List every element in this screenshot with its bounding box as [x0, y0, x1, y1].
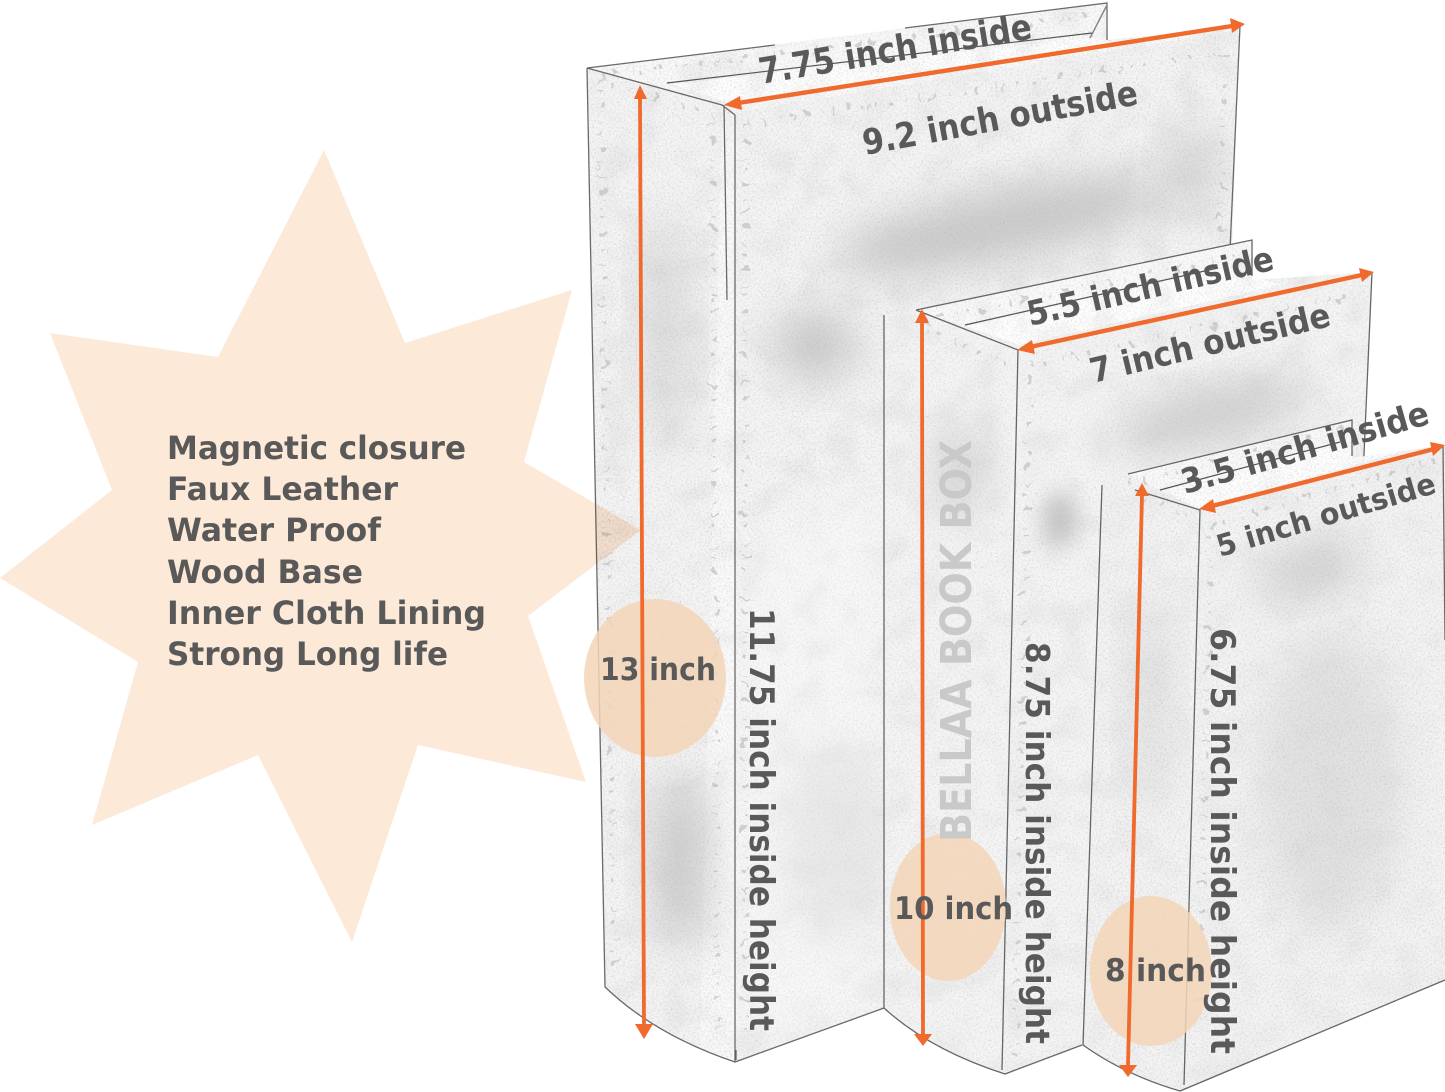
label: 11.75 inch inside height: 11.75 inch inside height	[741, 608, 781, 1031]
highlight circle: 8 inch	[1090, 896, 1212, 1046]
medium book box	[884, 235, 1374, 1075]
label: 5 inch outside: 5 inch outside	[1212, 467, 1440, 565]
label: 5.5 inch inside: 5.5 inch inside	[1023, 239, 1278, 335]
star badge	[0, 150, 641, 942]
label: 10 inch: 10 inch	[894, 891, 1013, 927]
big book box	[587, 0, 1247, 1070]
feature list	[167, 429, 486, 673]
feature list: Inner Cloth Lining	[167, 594, 486, 632]
small book box	[1083, 415, 1445, 1092]
arrow: 10 inch height	[914, 309, 932, 1046]
label: 6.75 inch inside height: 6.75 inch inside height	[1202, 628, 1242, 1054]
highlight circle: 13 inch	[584, 599, 726, 757]
feature list: Strong Long life	[167, 635, 448, 673]
arrow: 13 inch height	[634, 85, 653, 1039]
feature list: Water Proof	[167, 511, 382, 549]
highlight circle: 10 inch	[890, 833, 1006, 981]
label: 8 inch: 8 inch	[1105, 953, 1206, 989]
label: 7 inch outside: 7 inch outside	[1086, 295, 1334, 392]
label: 13 inch: 13 inch	[600, 652, 716, 688]
feature list: Faux Leather	[167, 470, 398, 508]
feature list: Wood Base	[167, 553, 363, 591]
label: 9.2 inch outside: 9.2 inch outside	[859, 74, 1141, 164]
arrow: 7 inch outside width	[1017, 268, 1374, 354]
arrow: 9.2 inch outside width	[724, 18, 1245, 110]
arrow: 5 inch outside width	[1199, 442, 1445, 513]
label: 8.75 inch inside height: 8.75 inch inside height	[1018, 642, 1057, 1044]
brand label: BELLAA BOOK BOX	[932, 440, 982, 842]
thin inside-width arrows	[667, 33, 1340, 1060]
label: 7.75 inch inside: 7.75 inch inside	[756, 7, 1035, 93]
feature list: Magnetic closure	[167, 429, 466, 467]
arrow: 8 inch height	[1119, 483, 1149, 1077]
